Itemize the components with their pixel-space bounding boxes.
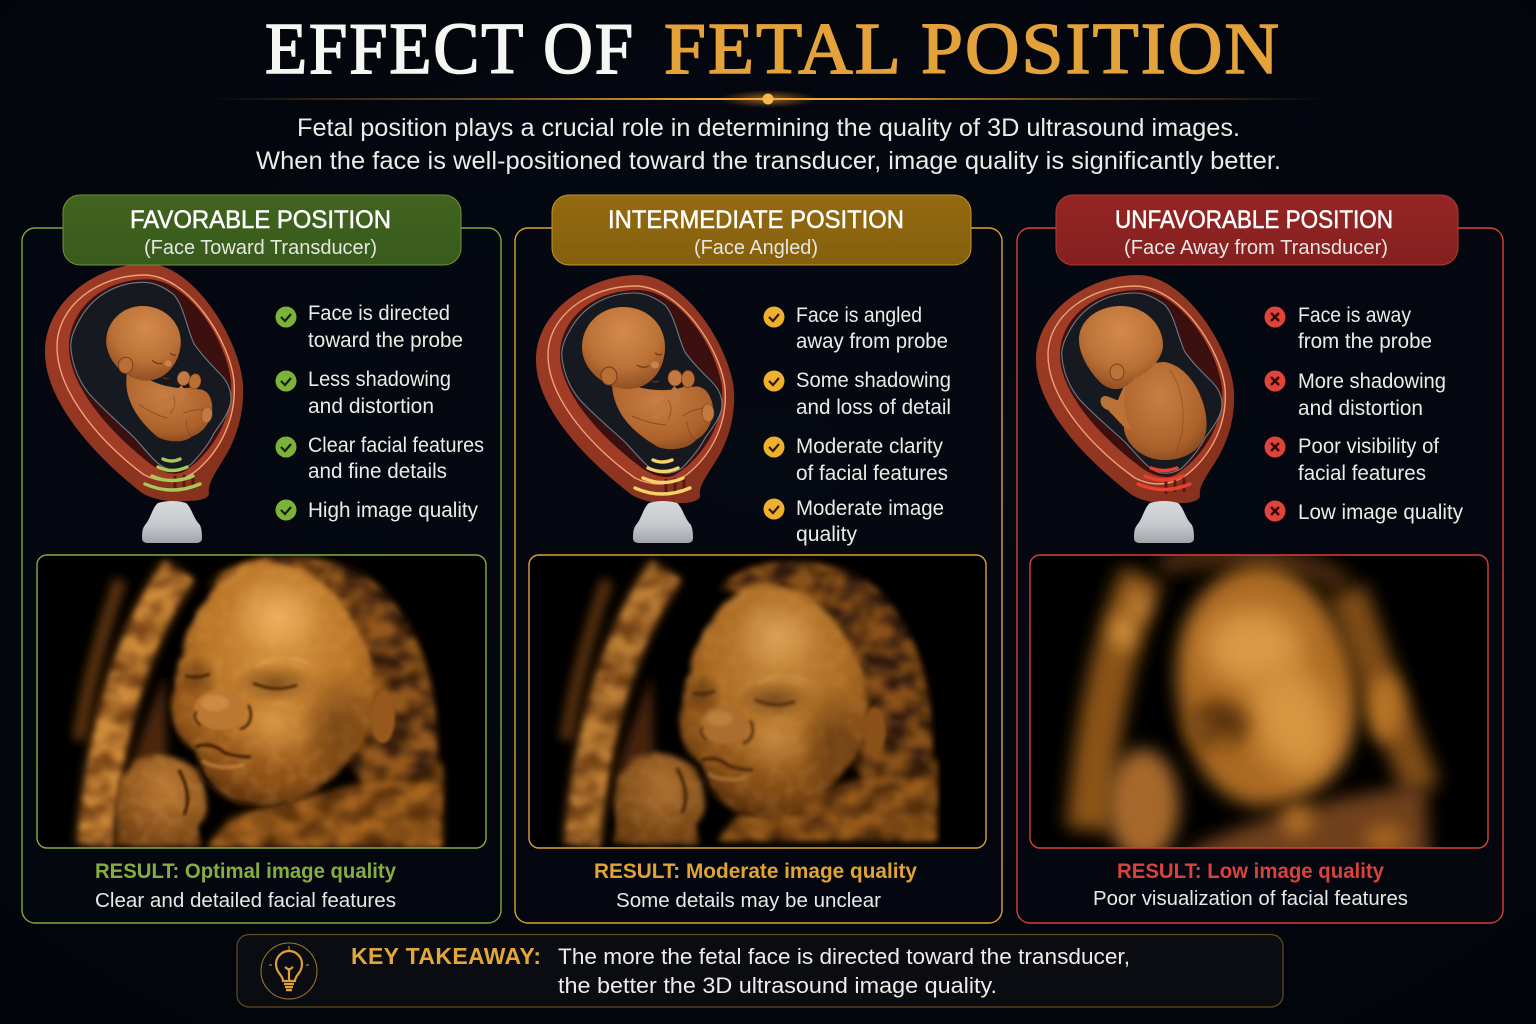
checklist: unfavorable: Low image quality: [1298, 501, 1463, 524]
title: [265, 8, 1281, 89]
checklist: favorable: and fine details: [308, 460, 447, 483]
checklist: favorable: Less shadowing: [308, 368, 451, 391]
result: moderate: Some details may be unclear: [616, 889, 881, 912]
checklist: favorable: [276, 302, 484, 522]
result: moderate: RESULT: Moderate image quality: [594, 859, 917, 883]
header: intermediate: (Face Angled): [694, 237, 818, 259]
checklist: intermediate: Face is angled: [796, 304, 922, 327]
header: unfavorable: (Face Away from Transducer): [1124, 237, 1388, 259]
result: low: [1093, 859, 1408, 910]
checklist: unfavorable: facial features: [1298, 462, 1426, 485]
intro text: Fetal position plays a crucial role in determining the quality of 3D ultrasound images.: [297, 114, 1240, 142]
result: optimal: RESULT: Optimal image quality: [95, 859, 396, 883]
checklist: intermediate: of facial features: [796, 462, 948, 485]
checklist: favorable: toward the probe: [308, 329, 463, 352]
checklist: intermediate: quality: [796, 523, 858, 546]
intro text: When the face is well-positioned toward the transducer, image quality is significantly better.: [256, 147, 1281, 175]
fetus back view: [1079, 306, 1207, 460]
key takeaway: [237, 934, 1283, 1007]
key takeaway: the better the 3D ultrasound image quality.: [558, 973, 997, 998]
title: EFFECT OF: [265, 8, 635, 89]
checklist: unfavorable: Face is away: [1298, 304, 1411, 327]
intro text: [256, 114, 1281, 175]
header: favorable: [63, 195, 461, 265]
result: low: Poor visualization of facial features: [1093, 887, 1408, 910]
checklist: unfavorable: [1264, 304, 1463, 524]
checklist: unfavorable: and distortion: [1298, 397, 1423, 420]
result: low: RESULT: Low image quality: [1117, 859, 1384, 883]
header: intermediate: INTERMEDIATE POSITION: [608, 206, 904, 234]
header: favorable: FAVORABLE POSITION: [130, 206, 391, 234]
header: intermediate: [552, 195, 971, 265]
checklist: unfavorable: More shadowing: [1298, 370, 1446, 393]
checklist: intermediate: Moderate clarity: [796, 435, 943, 458]
checklist: favorable: Clear facial features: [308, 434, 484, 457]
result: optimal: Clear and detailed facial features: [95, 889, 396, 912]
ultrasound image: low: [1030, 555, 1488, 870]
title divider: [210, 90, 1326, 108]
title: FETAL POSITION: [664, 8, 1281, 89]
header: unfavorable: UNFAVORABLE POSITION: [1115, 206, 1393, 234]
header: favorable: (Face Toward Transducer): [144, 237, 377, 259]
fetus diagram: favorable: [45, 264, 243, 543]
ultrasound image: optimal: [37, 555, 486, 848]
checklist: favorable: High image quality: [308, 499, 478, 522]
checklist: intermediate: and loss of detail: [796, 396, 951, 419]
icon: light bulb: [261, 943, 317, 999]
panel: favorable position: [22, 195, 501, 923]
checklist: favorable: and distortion: [308, 395, 434, 418]
checklist: intermediate: Some shadowing: [796, 369, 951, 392]
fetus diagram: unfavorable: [1036, 275, 1234, 543]
key takeaway: The more the fetal face is directed toward the transducer,: [558, 944, 1130, 969]
checklist: unfavorable: from the probe: [1298, 330, 1432, 353]
checklist: intermediate: [764, 304, 951, 546]
checklist: intermediate: away from probe: [796, 330, 948, 353]
checklist: favorable: Face is directed: [308, 302, 450, 325]
ultrasound image: moderate: [529, 555, 986, 848]
checklist: intermediate: Moderate image: [796, 497, 944, 520]
fetus diagram: intermediate: [536, 275, 734, 543]
result: optimal: [95, 859, 396, 912]
header: unfavorable: [1056, 195, 1458, 265]
result: moderate: [594, 859, 917, 912]
panel: intermediate position: [515, 195, 1002, 923]
key takeaway: KEY TAKEAWAY:: [351, 943, 541, 969]
panel: unfavorable position: [1017, 195, 1503, 923]
checklist: unfavorable: Poor visibility of: [1298, 435, 1439, 458]
